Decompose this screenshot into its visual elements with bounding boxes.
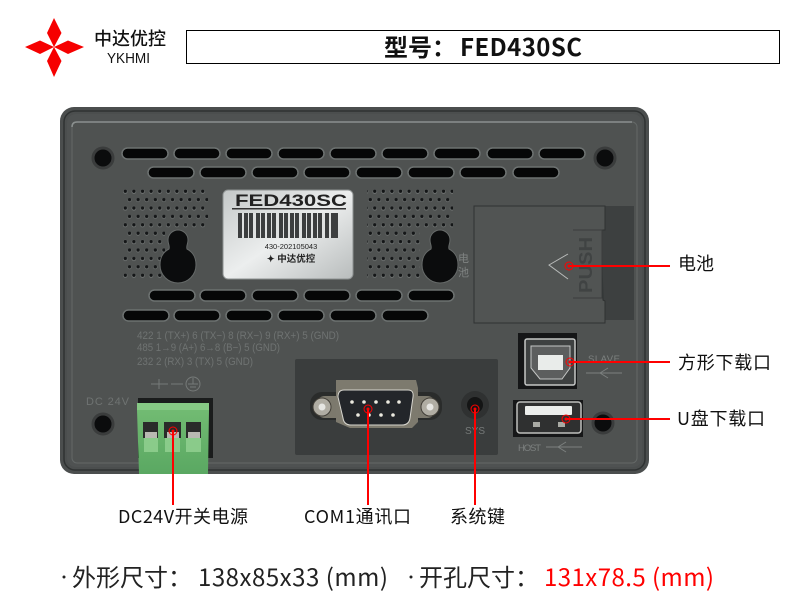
pin-out silk text: 422 1 (TX+) 6 (TX−) 8 (RX−) 9 (RX+) 5 (GND) bbox=[137, 330, 339, 342]
COM recess panel bbox=[295, 359, 498, 455]
keyhole right bbox=[422, 230, 458, 283]
battery cover bbox=[474, 206, 634, 323]
system key label: 系统键 bbox=[450, 503, 505, 529]
pin-out silk text: 485 1→9 (A+) 6→8 (B−) 5 (GND) bbox=[137, 342, 280, 354]
title box bbox=[186, 28, 780, 64]
outer size value: 138x85x33 (mm) bbox=[198, 558, 388, 593]
battery label: 电池 bbox=[678, 250, 714, 276]
download port label: 方形下载口 bbox=[678, 349, 771, 375]
DB9 COM port bbox=[310, 380, 442, 428]
USB disk label: U盘下载口 bbox=[677, 405, 765, 431]
battery silk text: 池 bbox=[458, 266, 469, 279]
panel: device rear view bbox=[60, 107, 649, 474]
bullet bbox=[410, 576, 412, 578]
cutout value: 131x78.5 (mm) bbox=[544, 558, 714, 593]
USB-B port bbox=[518, 333, 622, 389]
perforated dots right bbox=[367, 189, 453, 281]
callout: USB disk port bbox=[562, 405, 765, 431]
logo latin name: YKHMI bbox=[107, 50, 150, 67]
barcode bbox=[238, 213, 338, 238]
green terminal block bbox=[137, 403, 209, 474]
USB-A port bbox=[513, 400, 583, 454]
SYS silk text: SYS bbox=[465, 426, 485, 437]
system key bbox=[461, 391, 489, 437]
pin-out silk text bbox=[137, 330, 339, 368]
HOST silk text: HOST bbox=[518, 443, 541, 454]
pin-out silk text: 232 2 (RX) 3 (TX) 5 (GND) bbox=[137, 356, 253, 368]
serial number: 430-202105043 bbox=[265, 242, 317, 251]
power symbols bbox=[151, 377, 200, 391]
callout: COM1 bbox=[304, 405, 411, 529]
cutout label: 开孔尺寸： bbox=[419, 558, 539, 593]
bullet bbox=[62, 576, 66, 578]
vent slots bbox=[122, 148, 585, 321]
battery silk text bbox=[458, 252, 469, 279]
label model: FED430SC bbox=[235, 191, 347, 210]
callout: power bbox=[118, 427, 248, 529]
battery silk text: 电 bbox=[458, 252, 469, 265]
COM1 label: COM1通讯口 bbox=[304, 503, 411, 529]
title label: 型号： bbox=[384, 28, 456, 63]
callout: system key bbox=[450, 405, 505, 529]
logo bbox=[25, 18, 166, 77]
label logo: ✦ 中达优控 bbox=[267, 253, 316, 265]
logo name: 中达优控 bbox=[94, 25, 166, 51]
product label bbox=[223, 190, 353, 279]
push arrow bbox=[549, 254, 568, 279]
title model: FED430SC bbox=[460, 28, 582, 63]
outer size label: 外形尺寸： bbox=[72, 558, 192, 593]
SLAVE silk text: SLAVE bbox=[588, 354, 620, 365]
perforated dots left bbox=[123, 189, 208, 281]
icon: red four-point star bbox=[25, 18, 84, 77]
callout: download port bbox=[566, 349, 771, 375]
power label: DC24V开关电源 bbox=[118, 503, 248, 529]
dimensions footer bbox=[62, 558, 714, 593]
keyhole left bbox=[160, 230, 196, 283]
power socket recess bbox=[138, 398, 213, 458]
mounting holes bbox=[93, 148, 615, 434]
callout: battery bbox=[565, 250, 714, 276]
DC 24V silk text: DC 24V bbox=[86, 396, 130, 408]
push text: PUSH bbox=[576, 237, 596, 293]
